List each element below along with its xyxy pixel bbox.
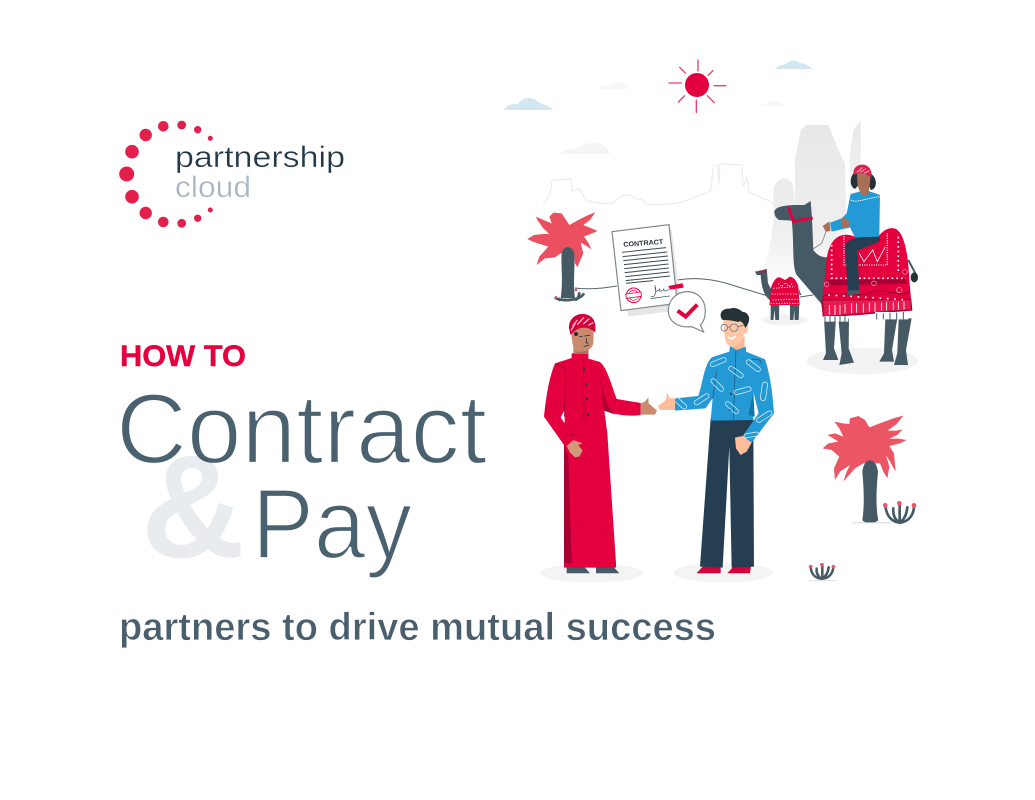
subheading: partners to drive mutual success	[119, 606, 716, 649]
camel legs	[823, 318, 912, 365]
neck and head	[730, 337, 745, 350]
character: man in blue shirt	[658, 308, 774, 583]
shoes	[567, 567, 619, 573]
rider legs	[845, 236, 880, 292]
pen	[668, 283, 684, 290]
rider headwrap	[854, 165, 872, 178]
desert plant right	[883, 501, 916, 523]
fringe	[823, 312, 908, 322]
robe details	[555, 358, 584, 435]
bridle	[788, 207, 813, 221]
blanket	[822, 228, 912, 317]
neck	[573, 340, 588, 355]
hands	[658, 393, 675, 410]
shirt paperclip pattern	[674, 357, 773, 438]
icon: sun	[669, 60, 726, 113]
shadow	[674, 563, 773, 583]
heading: Contract: Contract	[116, 373, 487, 484]
shadow	[541, 563, 643, 583]
camel body and neck	[774, 201, 840, 313]
logo word: cloud: cloud	[175, 171, 251, 204]
heading: Pay: Pay	[252, 468, 412, 579]
mountain outline	[543, 164, 780, 207]
turban	[569, 314, 596, 335]
blanket pattern	[824, 232, 908, 315]
character: man in red robe	[541, 314, 657, 583]
robe	[544, 353, 641, 568]
rider sweater	[830, 190, 880, 237]
shoes	[697, 567, 751, 573]
small camel	[755, 269, 807, 326]
camel shadow	[807, 348, 918, 374]
logo: partnership cloud	[119, 121, 345, 228]
illustration: desert scene	[504, 60, 918, 583]
clouds	[504, 60, 812, 154]
palm tree left	[527, 212, 598, 301]
rock formations	[757, 120, 861, 290]
stamp	[625, 287, 642, 304]
heading: ampersand: &	[141, 425, 245, 588]
face	[571, 320, 594, 352]
rider hair and head	[851, 172, 876, 190]
rider hands	[823, 217, 849, 232]
desert plant small	[809, 563, 835, 581]
contract document	[612, 225, 684, 317]
logo word: partnership: partnership	[175, 141, 345, 174]
heading: HOW TO: HOW TO	[120, 340, 246, 373]
ground line	[575, 279, 813, 297]
shirt	[675, 346, 774, 443]
logo dot ring	[119, 121, 213, 228]
signature	[651, 285, 670, 299]
hair	[721, 308, 749, 328]
camel with rider	[774, 165, 918, 374]
hands	[641, 397, 657, 415]
speech bubble with check	[668, 292, 705, 332]
glasses	[721, 324, 743, 331]
tail	[908, 260, 915, 273]
trousers	[700, 418, 754, 568]
palm tree right	[823, 416, 907, 523]
contract document: CONTRACT	[623, 239, 664, 249]
